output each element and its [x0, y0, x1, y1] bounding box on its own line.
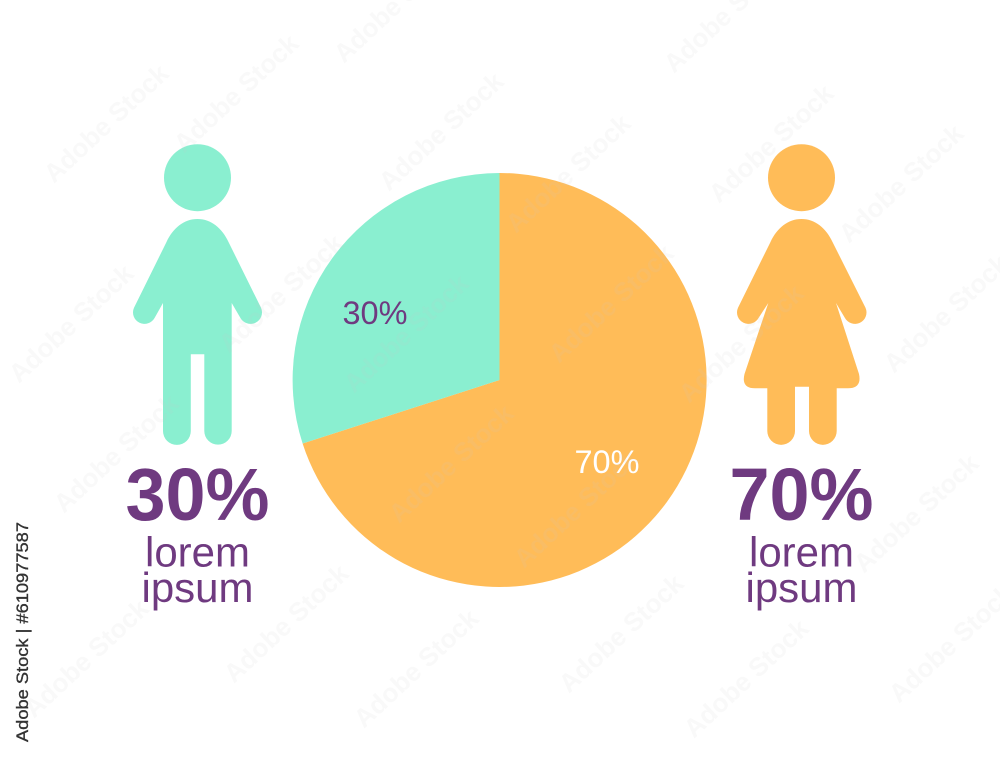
left percentage: 30% [126, 453, 270, 536]
left caption line 1: lorem [145, 528, 250, 576]
faint repeated watermark: Adobe Stock [18, 593, 155, 723]
faint repeated watermark: Adobe Stock [373, 66, 510, 196]
faint repeated watermark: Adobe Stock [543, 238, 680, 368]
faint repeated watermark: Adobe Stock [218, 558, 355, 688]
faint repeated watermark: Adobe Stock [348, 603, 485, 733]
faint repeated watermark: Adobe Stock [500, 108, 637, 238]
pie slice: 70% [303, 173, 707, 587]
faint repeated watermark: Adobe Stock [678, 613, 815, 743]
faint repeated watermark: Adobe Stock [508, 443, 645, 573]
faint repeated watermark: Adobe Stock [383, 398, 520, 528]
faint repeated watermark: Adobe Stock [703, 78, 840, 208]
right caption line 1: lorem [749, 528, 854, 576]
faint repeated watermark: Adobe Stock [48, 388, 185, 518]
faint repeated watermark: Adobe Stock [3, 258, 140, 388]
faint repeated watermark: Adobe Stock [673, 278, 810, 408]
faint repeated watermark: Adobe Stock [553, 568, 690, 698]
faint repeated watermark: Adobe Stock [213, 228, 350, 358]
pie label: 30%: 30% [342, 295, 408, 331]
right stat: 70% lorem ipsum [730, 453, 874, 611]
faint repeated watermark: Adobe Stock [338, 268, 475, 398]
right caption line 2: ipsum [746, 564, 858, 611]
right percentage: 70% [730, 453, 874, 536]
pie slice: 30% [293, 173, 500, 444]
faint repeated watermark: Adobe Stock [833, 118, 970, 248]
pie chart [293, 173, 707, 587]
faint repeated watermark: Adobe Stock [38, 58, 175, 188]
icon: male figure [133, 144, 262, 445]
left caption line 2: ipsum [142, 564, 254, 611]
faint repeated watermark: Adobe Stock [168, 28, 305, 158]
icon: female figure [737, 144, 866, 445]
pie label: 70%: 70% [574, 444, 640, 480]
stock image id sidebar: Adobe Stock | #610977587 [13, 522, 32, 742]
faint repeated watermark: Adobe Stock [848, 448, 985, 578]
left stat: 30% lorem ipsum [126, 453, 270, 611]
